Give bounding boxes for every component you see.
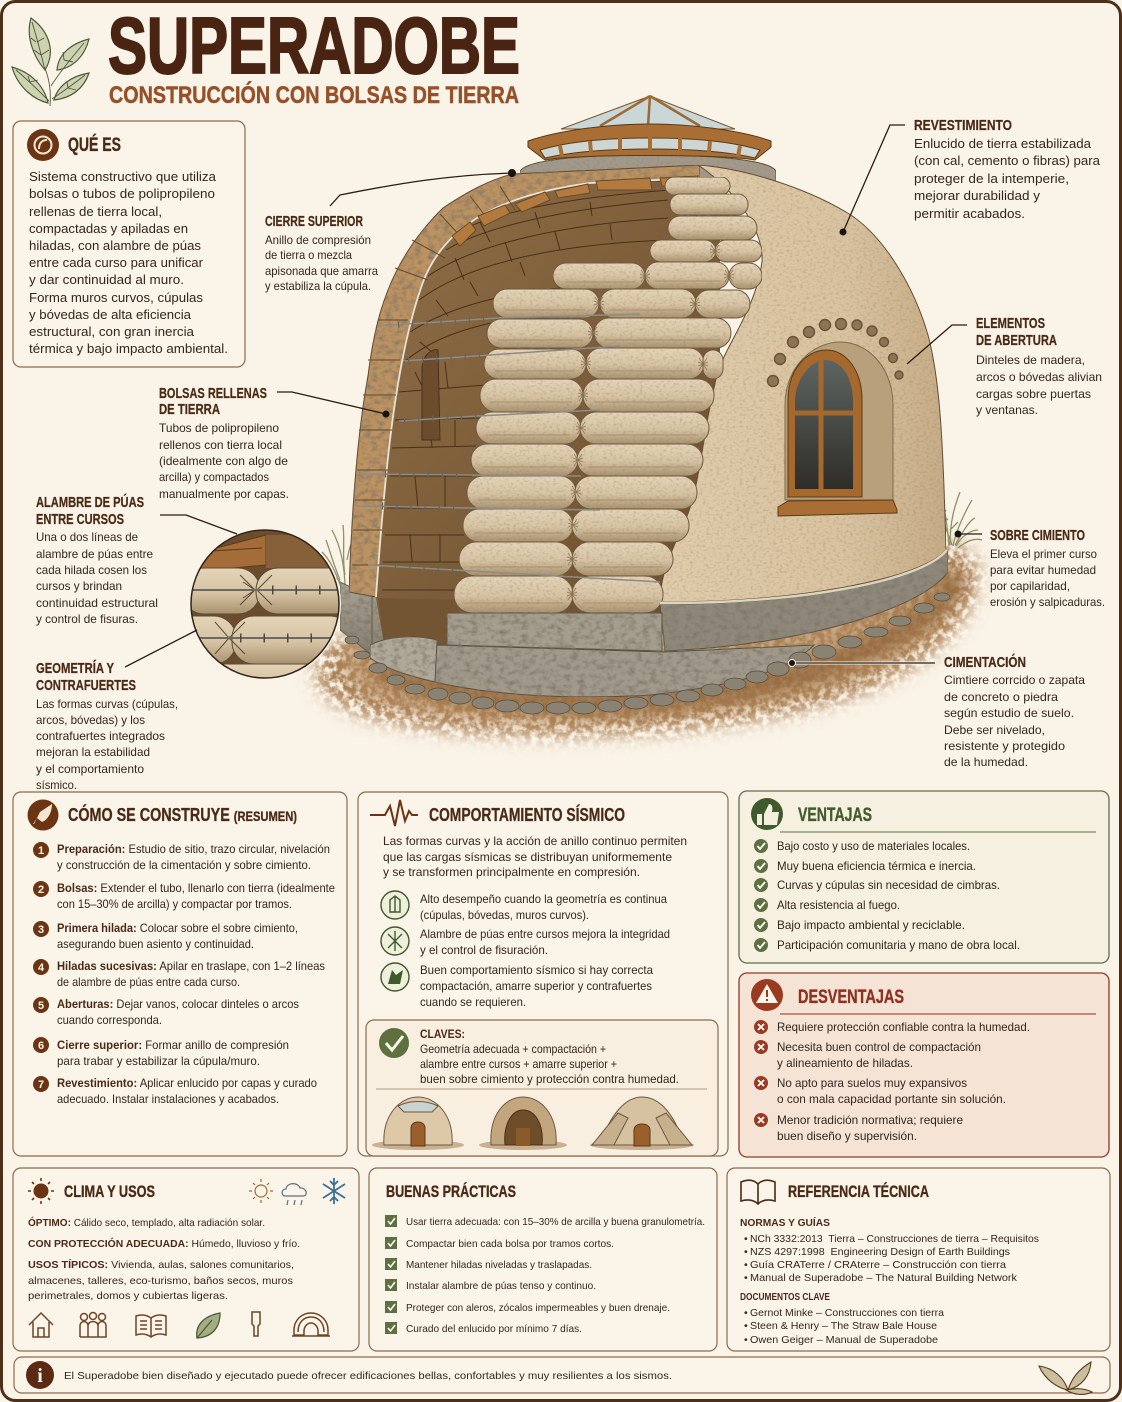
heading: geometría: GEOMETRÍA Y: [36, 660, 114, 677]
text: cierre superior: Anillo de compresión: [265, 233, 371, 247]
text: cimentación: resistente y protegido: [944, 739, 1065, 753]
text: clima: USOS TÍPICOS: Vivienda, aulas, salones comunitarios,: [28, 1258, 294, 1271]
arrow: geometría: [125, 630, 197, 667]
earth bags: [454, 177, 762, 613]
list: desventajas: Menor tradición normativa; requiere: [777, 1113, 963, 1127]
text: elementos de abertura: arcos o bóvedas alivian: [976, 370, 1102, 384]
heading: cómo se construye: CÓMO SE CONSTRUYE (RESUMEN): [68, 804, 297, 825]
callout: revestimiento: [840, 117, 1100, 236]
callout: sobre cimiento: [954, 527, 1105, 609]
text: normas y guías: NORMAS Y GUÍAS: [740, 1216, 830, 1229]
list: desventajas: Necesita buen control de compactación: [777, 1040, 981, 1054]
text: documentos clave: •: [744, 1334, 748, 1346]
ground soil: [315, 540, 978, 737]
list: ventajas: Alta resistencia al fuego.: [777, 898, 900, 912]
heading: elementos de abertura: ELEMENTOS: [976, 315, 1045, 332]
icon: green leaves: [12, 18, 89, 106]
text: claves: alambre entre cursos + amarre superior +: [420, 1057, 617, 1071]
seismic item: compaction: compactación, amarre superior y contrafuertes: [420, 979, 652, 993]
heading: alambre de púas: [36, 493, 144, 528]
text: alambre de púas: alambre de púas entre: [36, 547, 153, 561]
dome interior: [376, 178, 720, 650]
step 4: 4: [38, 962, 45, 974]
text: alambre de púas: [36, 530, 158, 626]
list: desventajas: o con mala capacidad portante sin solución.: [777, 1092, 1006, 1106]
step 4: de alambre de púas entre cada curso.: [57, 975, 240, 989]
step 7: Revestimiento: Aplicar enlucido por capas y curado: [57, 1076, 317, 1090]
icon: warning: [751, 979, 783, 1011]
heading: geometría: CONTRAFUERTES: [36, 677, 136, 694]
arrow: sobre cimiento: [954, 530, 982, 538]
text block: qué es: estructural, con gran inercia: [29, 325, 194, 339]
text: normas y guías: Manual de Superadobe – The Natural Building Network: [750, 1272, 1018, 1284]
heading: comportamiento sísmico: COMPORTAMIENTO SÍSMICO: [429, 804, 625, 825]
text: closing note: El Superadobe bien diseñado y ejecutado puede ofrecer edificaciones bellas, confortables y muy resilientes a los sismos.: [64, 1370, 672, 1382]
callout: elementos de abertura: [907, 315, 1102, 417]
step 3: [33, 921, 298, 951]
text: elementos de abertura: y ventanas.: [976, 403, 1038, 417]
step 6: [33, 1037, 289, 1068]
icon: seismograph: [370, 800, 418, 826]
text: cierre superior: y estabiliza la cúpula.: [265, 279, 371, 293]
text: claves: [420, 1027, 679, 1086]
text: normas y guías: NCh 3332:2013 Tierra – Construcciones de tierra – Requisitos: [750, 1233, 1039, 1245]
icon: check: [379, 1028, 409, 1058]
text: claves: CLAVES:: [420, 1027, 465, 1041]
text: cierre superior: [265, 233, 378, 293]
icon: footer leaves: [1039, 1362, 1092, 1394]
icon: snowflake: [323, 1178, 345, 1204]
panel: ventajas: [739, 791, 1109, 963]
text: geometría: sísmico.: [36, 778, 77, 792]
text: cierre superior: apisonada que amarra: [265, 264, 378, 278]
mini dome: arched vault: [479, 1097, 567, 1150]
seismic item: compaction: cuando se requieren.: [420, 995, 526, 1009]
step 1: Preparación: Estudio de sitio, trazo circular, nivelación: [57, 842, 330, 856]
text: cimentación: [944, 673, 1085, 769]
text: documentos clave: •: [744, 1307, 748, 1319]
cut earth arch: [349, 165, 700, 597]
window and niche: [778, 342, 897, 516]
step 5: Aberturas: Dejar vanos, colocar dinteles o arcos: [57, 997, 299, 1011]
text: alambre de púas: Una o dos líneas de: [36, 530, 138, 544]
text: elementos de abertura: Dinteles de madera,: [976, 353, 1085, 367]
list: buenas prácticas: Proteger con aleros, zócalos impermeables y buen drenaje.: [406, 1302, 670, 1314]
text: seismic intro: que las cargas sísmicas se distribuyan uniformemente: [383, 850, 672, 864]
list: ventajas: Bajo impacto ambiental y reciclable.: [777, 918, 965, 932]
illustration: superadobe dome cutaway: [315, 96, 982, 737]
list: ventajas: Bajo costo y uso de materiales locales.: [777, 839, 970, 853]
text: cimentación: de concreto o piedra: [944, 690, 1058, 704]
footer note bar: [14, 1357, 1110, 1394]
step 5: cuando corresponda.: [57, 1013, 162, 1027]
text: geometría: [36, 697, 178, 792]
text: sobre cimiento: para evitar humedad: [990, 563, 1096, 577]
heading: sobre cimiento: SOBRE CIMIENTO: [990, 527, 1085, 544]
text: cimentación: Cimtiere corrcido o zapata: [944, 673, 1085, 687]
text: normas y guías: •: [744, 1259, 748, 1271]
step 2: Bolsas: Extender el tubo, llenarlo con tierra (idealmente: [57, 881, 335, 895]
text: revestimiento: mejorar durabilidad y: [914, 189, 1041, 203]
text: revestimiento: [914, 137, 1100, 221]
list: desventajas: [754, 1020, 1030, 1143]
arch wire and blocks: [352, 176, 700, 597]
decorative vent holes: [768, 318, 903, 386]
text block: qué es: rellenas de tierra local,: [29, 205, 162, 219]
text block: qué es: Sistema constructivo que utiliza: [29, 170, 216, 184]
icon: thumbs up: [751, 798, 783, 830]
step 3: 3: [38, 924, 44, 936]
text: documentos clave: •: [744, 1320, 748, 1332]
text block: qué es: y dar continuidad al muro.: [29, 273, 184, 287]
text block: qué es: y bóvedas de alta eficiencia: [29, 308, 191, 322]
text: sobre cimiento: [990, 547, 1105, 609]
text: geometría: arcos, bóvedas) y los: [36, 713, 145, 727]
heading: alambre de púas: ENTRE CURSOS: [36, 511, 124, 528]
callout: cimentación: [788, 653, 1085, 769]
heading: qué es: QUÉ ES: [68, 134, 121, 156]
list: ventajas: [754, 839, 1020, 952]
text: geometría: contrafuertes integrados: [36, 729, 165, 743]
text: normas y guías: •: [744, 1246, 748, 1258]
icon: qué es emblem: [27, 129, 59, 161]
panel: qué es: [13, 121, 245, 367]
dome plaster shell: [660, 165, 946, 602]
text: geometría: Las formas curvas (cúpulas,: [36, 697, 178, 711]
text block: qué es: hiladas, con alambre de púas: [29, 239, 201, 253]
heading: alambre de púas: ALAMBRE DE PÚAS: [36, 493, 144, 511]
step 7: [33, 1076, 317, 1106]
icon: info: i: [37, 1365, 43, 1387]
text: clima: [28, 1216, 300, 1302]
step 1: y construcción de la cimentación y sobre cimiento.: [57, 858, 311, 872]
text: bolsas rellenas: (idealmente con algo de: [159, 454, 288, 468]
text: normas y guías: NZS 4297:1998 Engineering Design of Earth Buildings: [750, 1246, 1010, 1258]
list: buenas prácticas: [385, 1215, 705, 1335]
text: elementos de abertura: cargas sobre puertas: [976, 387, 1091, 401]
icon: rain cloud: [282, 1184, 306, 1205]
foundation plinth: [370, 550, 948, 697]
list: desventajas: buen diseño y supervisión.: [777, 1129, 917, 1143]
step 1: 1: [38, 845, 44, 857]
arrow: bolsas rellenas: [277, 392, 390, 418]
mini dome: plastered: [372, 1097, 464, 1150]
step 2: [33, 881, 335, 911]
step 3: Primera hilada: Colocar sobre el sobre cimiento,: [57, 921, 298, 935]
text: seismic intro: y se transformen principalmente en compresión.: [383, 865, 640, 879]
heading: elementos de abertura: [976, 315, 1057, 349]
text: sobre cimiento: por capilaridad,: [990, 579, 1070, 593]
mini dome: buttressed: [590, 1097, 694, 1150]
step 2: 2: [38, 884, 44, 896]
seismic item: wire: y el control de fisuración.: [420, 943, 548, 957]
text: revestimiento: Enlucido de tierra estabilizada: [914, 137, 1091, 151]
lens: barbed wire detail: [190, 529, 341, 679]
text: geometría: y el comportamiento: [36, 762, 144, 776]
heading: bolsas rellenas: DE TIERRA: [159, 401, 220, 418]
step 6: para trabar y estabilizar la cúpula/muro.: [57, 1054, 260, 1068]
list: desventajas: No apto para suelos muy expansivos: [777, 1076, 967, 1090]
text: bolsas rellenas: manualmente por capas.: [159, 487, 289, 501]
list: ventajas: Curvas y cúpulas sin necesidad de cimbras.: [777, 878, 1000, 892]
list: buenas prácticas: Compactar bien cada bolsa por tramos cortos.: [406, 1238, 614, 1250]
window niche: [422, 350, 440, 440]
list: desventajas: Requiere protección confiable contra la humedad.: [777, 1020, 1030, 1034]
seismic item: geometry: (cúpulas, bóvedas, muros curvos).: [420, 908, 589, 922]
text: cierre superior: de tierra o mezcla: [265, 248, 352, 262]
step 7: adecuado. Instalar instalaciones y acabados.: [57, 1092, 279, 1106]
heading: geometría: [36, 660, 136, 694]
heading: bolsas rellenas: [159, 385, 267, 418]
text block: qué es: compactadas y apiladas en: [29, 222, 188, 236]
text: cimentación: Debe ser nivelado,: [944, 723, 1045, 737]
text: bolsas rellenas: rellenos con tierra local: [159, 438, 282, 452]
step 4: Hiladas sucesivas: Apilar en traslape, con 1–2 líneas: [57, 959, 325, 973]
icon: open book: [741, 1180, 775, 1204]
text: claves: buen sobre cimiento y protección contra humedad.: [420, 1072, 679, 1086]
list: buenas prácticas: Instalar alambre de púas tenso y continuo.: [406, 1280, 596, 1292]
text block: qué es: bolsas o tubos de polipropileno: [29, 187, 215, 201]
heading: ventajas: VENTAJAS: [798, 805, 872, 826]
arrow: revestimiento: [840, 125, 905, 236]
step 4: [33, 959, 325, 989]
text: clima: almacenes, talleres, eco-turismo, baños secos, muros: [28, 1275, 293, 1287]
step 3: asegurando buen asiento y continuidad.: [57, 937, 254, 951]
step 7: 7: [38, 1079, 44, 1091]
text: revestimiento: proteger de la intemperie,: [914, 172, 1069, 186]
text: documentos clave: Gernot Minke – Construcciones con tierra: [750, 1307, 944, 1319]
step 2: con 15–30% de arcilla) y compactar por tramos.: [57, 897, 292, 911]
subtitle: CONSTRUCCIÓN CON BOLSAS DE TIERRA: [109, 81, 519, 109]
seismic item: geometry: [381, 891, 667, 922]
panel: buenas prácticas: [369, 1168, 717, 1351]
heading: clima y usos: CLIMA Y USOS: [64, 1182, 155, 1201]
skylight cupola: [528, 96, 771, 160]
steps list: [33, 842, 335, 1106]
callout: claves: [366, 1020, 718, 1156]
text block: qué es: térmica y bajo impacto ambiental.: [29, 342, 228, 356]
seismic item: compaction: Buen comportamiento sísmico si hay correcta: [420, 963, 653, 977]
seismic item: wire: [381, 927, 670, 957]
barbed wire: [356, 314, 660, 582]
heading: cimentación: CIMENTACIÓN: [944, 653, 1026, 671]
icon: trowel: [28, 800, 58, 830]
text: normas y guías: •: [744, 1233, 748, 1245]
text: revestimiento: (con cal, cemento o fibras) para: [914, 154, 1100, 168]
text: geometría: mejoran la estabilidad: [36, 745, 150, 759]
text: revestimiento: permitir acabados.: [914, 207, 1025, 221]
text: bolsas rellenas: arcilla) y compactados: [159, 470, 269, 484]
text: documentos clave: Owen Geiger – Manual de Superadobe: [750, 1334, 938, 1346]
text: normas y guías: Guía CRATerre / CRAterre – Construcción con tierra: [750, 1259, 1006, 1271]
heading: elementos de abertura: DE ABERTURA: [976, 332, 1057, 349]
step 1: [33, 842, 330, 872]
left plinth: [340, 582, 401, 655]
text: elementos de abertura: [976, 353, 1102, 417]
text: sobre cimiento: Eleva el primer curso: [990, 547, 1097, 561]
title: SUPERADOBE: [108, 1, 520, 90]
text: alambre de púas: cursos y brindan: [36, 579, 122, 593]
arrow: cimentación: [788, 660, 935, 666]
heading: desventajas: DESVENTAJAS: [798, 987, 904, 1008]
heading: referencia técnica: REFERENCIA TÉCNICA: [788, 1182, 929, 1201]
heading: revestimiento: REVESTIMIENTO: [914, 117, 1012, 134]
arrow: alambre de púas: [160, 515, 237, 534]
heading: bolsas rellenas: BOLSAS RELLENAS: [159, 385, 267, 402]
panel: referencia técnica: [727, 1168, 1110, 1351]
text: seismic intro: [383, 834, 687, 879]
list: buenas prácticas: Mantener hiladas niveladas y traslapadas.: [406, 1259, 592, 1271]
step 5: [33, 997, 299, 1027]
text: clima: ÓPTIMO: Cálido seco, templado, alta radiación solar.: [28, 1216, 265, 1229]
text: alambre de púas: y control de fisuras.: [36, 612, 138, 626]
foundation rocks: [345, 593, 950, 714]
arrow: elementos de abertura: [907, 325, 967, 364]
seismic item: compaction: [381, 963, 653, 1009]
text: documentos clave: Steen & Henry – The Straw Bale House: [750, 1320, 937, 1332]
callout: bolsas rellenas: [159, 385, 390, 501]
text: cimentación: según estudio de suelo.: [944, 706, 1074, 720]
seismic item: geometry: Alto desempeño cuando la geometría es continua: [420, 892, 667, 906]
list: ventajas: Participación comunitaria y mano de obra local.: [777, 938, 1020, 952]
icon: sun: [28, 1178, 54, 1204]
text: clima: perimetrales, domos y cubiertas ligeras.: [28, 1290, 228, 1302]
panel: desventajas: [739, 973, 1109, 1157]
panel: comportamiento sísmico: [358, 792, 728, 1156]
text block: qué es: [29, 170, 228, 356]
list: buenas prácticas: Usar tierra adecuada: con 15–30% de arcilla y buena granulometría.: [406, 1216, 705, 1228]
panel: cómo se construye: [13, 792, 347, 1156]
grass tufts: [320, 492, 982, 590]
text: claves: Geometría adecuada + compactación +: [420, 1042, 606, 1056]
text: normas y guías: •: [744, 1272, 748, 1284]
icon: sun outline: [249, 1179, 273, 1203]
text: sobre cimiento: erosión y salpicaduras.: [990, 595, 1105, 609]
step 6: 6: [38, 1040, 44, 1052]
callout: alambre de púas: [36, 493, 237, 626]
text block: qué es: Forma muros curvos, cúpulas: [29, 291, 203, 305]
step 6: Cierre superior: Formar anillo de compresión: [57, 1038, 289, 1052]
text: documentos clave: [740, 1291, 944, 1346]
text: cimentación: de la humedad.: [944, 755, 1028, 769]
heading: cierre superior: CIERRE SUPERIOR: [265, 213, 363, 230]
text: bolsas rellenas: [159, 421, 289, 501]
text: alambre de púas: continuidad estructural: [36, 596, 158, 610]
text block: qué es: entre cada curso para unificar: [29, 256, 203, 270]
text: normas y guías: [740, 1216, 1039, 1284]
callout: geometría y contrafuertes: [36, 630, 197, 792]
list: ventajas: Muy buena eficiencia térmica e inercia.: [777, 859, 976, 873]
panel: clima y usos: [13, 1168, 359, 1351]
seismic item: wire: Alambre de púas entre cursos mejora la integridad: [420, 927, 670, 941]
text: clima: CON PROTECCIÓN ADECUADA: Húmedo, lluvioso y frío.: [28, 1237, 300, 1250]
icon: info: [26, 1361, 54, 1389]
text: seismic intro: Las formas curvas y la acción de anillo continuo permiten: [383, 834, 687, 848]
step 5: 5: [38, 1000, 44, 1012]
list: buenas prácticas: Curado del enlucido por mínimo 7 días.: [406, 1323, 582, 1335]
text: documentos clave: DOCUMENTOS CLAVE: [740, 1291, 830, 1303]
callout: cierre superior: [265, 169, 516, 293]
icons: building uses: [29, 1312, 330, 1338]
text: alambre de púas: cada hilada cosen los: [36, 563, 147, 577]
concrete compression ring: [520, 155, 776, 182]
heading: buenas prácticas: BUENAS PRÁCTICAS: [386, 1182, 516, 1201]
arrow: cierre superior: [330, 169, 516, 206]
list: desventajas: y alineamiento de hiladas.: [777, 1056, 913, 1070]
text: bolsas rellenas: Tubos de polipropileno: [159, 421, 279, 435]
